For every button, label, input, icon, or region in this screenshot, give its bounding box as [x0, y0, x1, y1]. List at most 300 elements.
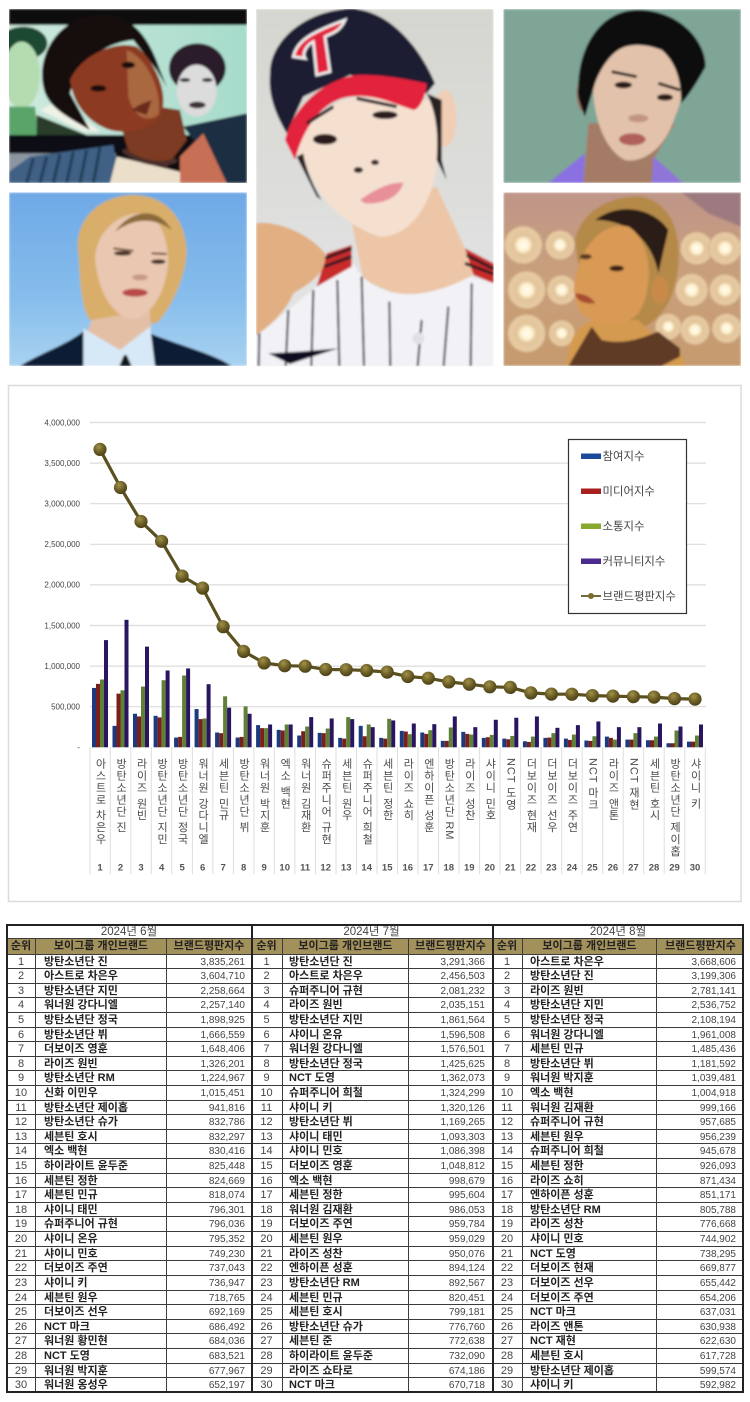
table: August 2024 ranking: 18 [501, 1204, 513, 1216]
table: July 2024 ranking: 998,679 [449, 1176, 485, 1187]
table: July 2024 ranking: 보이그룹 개인브랜드 [298, 940, 393, 952]
table: July 2024 ranking: 1,324,299 [440, 1088, 485, 1099]
table: June 2024 ranking: 방탄소년단 슈가 [44, 1116, 118, 1128]
table: June 2024 ranking: 2 [18, 970, 24, 982]
category name labels: 방탄소년단 RM [443, 758, 455, 840]
table: August 2024 ranking: 19 [501, 1218, 513, 1230]
category rank numbers: 6 [200, 862, 205, 874]
table: June 2024 ranking: 샤이니 민호 [44, 1248, 98, 1260]
table: July 2024 ranking: 15 [260, 1160, 273, 1172]
table: June 2024 ranking: 방탄소년단 정국 [44, 1014, 118, 1026]
photo: blond man in front of stage lights [503, 192, 742, 366]
table: July 2024 ranking: 세븐틴 호시 [289, 1306, 343, 1318]
table: July 2024 ranking: 18 [260, 1204, 273, 1216]
table: June 2024 ranking: 하이라이트 윤두준 [44, 1160, 128, 1172]
table: June 2024 ranking: 26 [15, 1321, 27, 1333]
table: August 2024 ranking: 1,961,008 [692, 1030, 736, 1041]
table: August 2024 ranking: NCT 도영 [530, 1248, 576, 1260]
table: July 2024 ranking: 674,186 [449, 1366, 485, 1377]
table: August 2024 ranking: 더보이즈 주연 [530, 1292, 594, 1304]
table: July 2024 ranking: 772,638 [449, 1336, 485, 1347]
table: June 2024 ranking: 방탄소년단 RM [44, 1072, 115, 1084]
table: July 2024 ranking: 1,861,564 [440, 1015, 485, 1026]
table: August 2024 ranking: 엔하이픈 성훈 [530, 1189, 594, 1201]
table: August 2024 ranking: 1,181,592 [692, 1059, 736, 1070]
table: June 2024 ranking: 슈퍼주니어 규현 [44, 1218, 118, 1230]
table: August 2024 ranking: 22 [501, 1262, 513, 1274]
table: July 2024 ranking: 세븐틴 정한 [289, 1189, 343, 1201]
table: July 2024 ranking: 1,169,265 [440, 1117, 485, 1128]
category name labels: 샤이니 민호 [484, 758, 496, 821]
table: June 2024 ranking: 818,074 [209, 1190, 245, 1201]
category name labels: 라이즈 원빈 [135, 758, 147, 821]
table: July 2024 ranking: 아스트로 차은우 [289, 970, 363, 982]
category rank numbers: 3 [138, 862, 144, 874]
table: June 2024 ranking: 30 [15, 1379, 27, 1391]
table: June 2024 ranking: 샤이니 온유 [44, 1233, 98, 1245]
table: June 2024 ranking: 3 [18, 985, 24, 997]
table: July 2024 ranking: 라이즈 성찬 [289, 1248, 343, 1260]
table: August 2024 ranking: 6 [504, 1029, 510, 1041]
table: August 2024 ranking: 워너원 박지훈 [530, 1072, 594, 1084]
table: June 2024 ranking: 21 [15, 1248, 27, 1260]
table: July 2024 ranking: NCT 도영 [289, 1072, 335, 1084]
table: June 2024 ranking: 941,816 [209, 1103, 245, 1114]
table: August 2024 ranking: 805,788 [700, 1205, 736, 1216]
category name labels: 방탄소년단 제이홉 [668, 758, 681, 857]
table: July 2024 ranking: 슈퍼주니어 규현 [289, 985, 363, 997]
category name labels: 세븐틴 민규 [217, 758, 229, 821]
table: August 2024 ranking: 630,938 [700, 1322, 736, 1333]
table: July 2024 ranking: 1 [263, 956, 270, 968]
table: July 2024 ranking: 820,451 [449, 1293, 485, 1304]
table: August 2024 ranking: 871,434 [700, 1176, 736, 1187]
table: August 2024 ranking: 655,442 [700, 1278, 736, 1289]
table: July 2024 ranking: 샤이니 온유 [289, 1029, 343, 1041]
table: June 2024 ranking: 17 [15, 1189, 27, 1201]
category name labels: 슈퍼주니어 희철 [361, 758, 373, 845]
table: June 2024 ranking: 워너원 강다니엘 [44, 999, 118, 1011]
table: June 2024 ranking: 12 [15, 1116, 27, 1128]
table: July 2024 ranking: 892,567 [449, 1278, 485, 1289]
table: July 2024 ranking: 30 [260, 1379, 273, 1391]
table: August 2024 ranking: 3,199,306 [692, 971, 736, 982]
table: June 2024 ranking: 7 [18, 1043, 24, 1055]
table: July 2024 ranking: 3,291,366 [440, 956, 485, 968]
table: June 2024 ranking: 1 [18, 956, 24, 968]
table: June 2024 ranking: 677,967 [209, 1366, 245, 1377]
photo collage and chart artwork [8, 9, 742, 902]
table: August 2024 ranking: 슈퍼주니어 규현 [530, 1116, 604, 1128]
category name labels: 세븐틴 원우 [340, 758, 352, 821]
table: July 2024 ranking: 29 [260, 1365, 273, 1377]
table: June 2024 ranking: 24 [15, 1292, 27, 1304]
table: July 2024 ranking: 670,718 [449, 1380, 485, 1391]
panel: chart frame [8, 386, 741, 902]
table: July 2024 ranking: 방탄소년단 슈가 [289, 1321, 363, 1333]
table: July 2024 ranking: 방탄소년단 정국 [289, 1058, 363, 1070]
table: July 2024 ranking: 894,124 [449, 1263, 485, 1274]
y axis labels: 2,500,000 [44, 540, 81, 549]
table: July 2024 ranking: 세븐틴 준 [289, 1335, 333, 1347]
table: July 2024 ranking: 4 [263, 999, 270, 1011]
table: August 2024 ranking: 669,877 [700, 1263, 736, 1274]
table: August 2024 ranking: 2 [504, 970, 510, 982]
table: August 2024 ranking: 851,171 [700, 1190, 736, 1201]
category rank numbers: 28 [649, 862, 659, 874]
table: June 2024 ranking: 순위 [11, 940, 31, 952]
category name labels [94, 758, 701, 857]
table: August 2024 ranking: 20 [501, 1233, 513, 1245]
August title [492, 924, 744, 939]
table: August 2024 ranking: 25 [501, 1306, 513, 1318]
table: July 2024 ranking: 17 [260, 1189, 273, 1201]
table: July 2024 ranking: 1,425,625 [440, 1059, 485, 1070]
chart legend: 브랜드평판지수 [602, 590, 676, 603]
table: June 2024 ranking: 6 [18, 1029, 24, 1041]
table: July 2024 ranking: 995,604 [449, 1190, 485, 1201]
table: July 2024 ranking: 23 [260, 1277, 273, 1289]
category rank numbers: 2 [118, 862, 123, 874]
category name labels: 세븐틴 호시 [648, 758, 660, 821]
category name labels: 라이즈 앤톤 [607, 758, 619, 821]
table: June 2024 ranking: 방탄소년단 진 [44, 956, 108, 968]
table: August 2024 ranking: 11 [501, 1102, 513, 1114]
y axis labels: 1,500,000 [44, 621, 81, 630]
table: July 2024 ranking: 9 [263, 1072, 270, 1084]
table: July 2024 ranking: 샤이니 키 [289, 1102, 333, 1114]
table: June 2024 ranking: 16 [15, 1175, 27, 1187]
category rank numbers: 10 [279, 862, 290, 874]
y axis labels: 4,000,000 [44, 418, 81, 427]
table: August 2024 ranking: 5 [504, 1014, 510, 1026]
table: July 2024 ranking: 20 [260, 1233, 273, 1245]
table: August 2024 ranking: 1,485,436 [692, 1044, 736, 1055]
table: June 2024 ranking: 세븐틴 원우 [44, 1292, 98, 1304]
table: August 2024 ranking: 엑소 백현 [530, 1087, 574, 1099]
y axis labels: 3,500,000 [44, 459, 81, 468]
table: June 2024 ranking: 세븐틴 민규 [44, 1189, 98, 1201]
category rank numbers: 9 [261, 862, 267, 874]
table: June 2024 ranking: 9 [18, 1072, 24, 1084]
table: July 2024 ranking: 엑소 백현 [289, 1175, 333, 1187]
table: June 2024 ranking: 796,301 [209, 1205, 245, 1216]
category grid lines [90, 747, 705, 874]
table: July 2024 ranking: 더보이즈 영훈 [289, 1160, 353, 1172]
y axis labels: - [77, 743, 80, 752]
table: July 2024 ranking: 방탄소년단 뷔 [289, 1116, 353, 1128]
table: August 2024 ranking: 방탄소년단 지민 [530, 999, 604, 1011]
table: August 2024 ranking [494, 926, 742, 1391]
table: July 2024 ranking: 776,760 [449, 1322, 485, 1333]
y axis labels: 500,000 [51, 702, 81, 712]
category name labels: 샤이니 키 [689, 758, 701, 810]
photo: portrait with green screen backdrop [0, 9, 247, 183]
table: June 2024 ranking: 686,492 [209, 1322, 245, 1333]
category rank numbers: 19 [464, 862, 475, 874]
chart legend: 참여지수 [602, 450, 644, 463]
table: August 2024 ranking: 23 [501, 1277, 513, 1289]
table: June 2024 ranking: 14 [15, 1145, 27, 1157]
table: August 2024 ranking: 744,902 [700, 1234, 736, 1245]
table: June 2024 ranking: 8 [18, 1058, 24, 1070]
table: July 2024 ranking: 1,362,073 [440, 1073, 485, 1084]
table: June 2024 ranking: 736,947 [209, 1278, 245, 1289]
table: July 2024 ranking: 986,053 [449, 1205, 485, 1216]
table: July 2024 ranking: 950,076 [449, 1249, 485, 1260]
table: July 2024 ranking: 2,456,503 [440, 971, 485, 982]
table: August 2024 ranking: 8 [504, 1058, 510, 1070]
table: June 2024 ranking: 1,898,925 [200, 1015, 245, 1026]
table: August 2024 ranking: 방탄소년단 진 [530, 970, 594, 982]
table: August 2024 ranking: 브랜드평판지수 [665, 940, 736, 952]
table: August 2024 ranking: 3 [504, 985, 510, 997]
table: June 2024 ranking: 방탄소년단 제이홉 [44, 1102, 128, 1114]
table: July 2024 ranking: 959,029 [449, 1234, 485, 1245]
table: July 2024 ranking: 28 [260, 1350, 273, 1362]
line series: brand reputation index [93, 443, 702, 706]
table: July 2024 ranking: 워너원 강다니엘 [289, 1043, 363, 1055]
table: August 2024 ranking: 945,678 [700, 1146, 736, 1157]
table: July 2024 ranking: 8 [263, 1058, 270, 1070]
table: July 2024 ranking: 슈퍼주니어 희철 [289, 1087, 363, 1099]
table: June 2024 ranking: 4 [18, 999, 24, 1011]
table: July 2024 ranking: 라이즈 쇼타로 [289, 1365, 353, 1377]
table: June 2024 ranking: 1,326,201 [200, 1059, 245, 1070]
table: June 2024 ranking: 652,197 [209, 1380, 245, 1391]
table: June 2024 ranking: 28 [15, 1350, 27, 1362]
category rank numbers: 24 [567, 862, 578, 874]
table: August 2024 ranking: 622,630 [700, 1336, 736, 1347]
table: July 2024 ranking: 브랜드평판지수 [415, 940, 486, 952]
table: August 2024 ranking: 라이즈 성찬 [530, 1218, 584, 1230]
table: June 2024 ranking: 신화 이민우 [44, 1087, 98, 1099]
table: June 2024 ranking: 1,666,559 [200, 1030, 245, 1041]
table: July 2024 ranking: 엔하이픈 성훈 [289, 1262, 353, 1274]
table: August 2024 ranking: 27 [501, 1335, 513, 1347]
table: June 2024 ranking: 27 [15, 1335, 27, 1347]
table: June 2024 ranking: 15 [15, 1160, 27, 1172]
table: June 2024 ranking: 더보이즈 주연 [44, 1262, 108, 1274]
table: July 2024 ranking [253, 926, 492, 1391]
category name labels: 라이즈 쇼히 [402, 758, 414, 821]
table: June 2024 ranking: 워너원 황민현 [44, 1335, 108, 1347]
table: June 2024 ranking: 19 [15, 1218, 27, 1230]
table: June 2024 ranking: 18 [15, 1204, 27, 1216]
table: August 2024 ranking: 24 [501, 1292, 513, 1304]
table: August 2024 ranking: 28 [501, 1350, 513, 1362]
table: July 2024 ranking: 799,181 [449, 1307, 485, 1318]
table: July 2024 ranking: 12 [260, 1116, 273, 1128]
table: June 2024 ranking: 워너원 박지훈 [44, 1365, 108, 1377]
category rank numbers: 13 [341, 862, 351, 874]
category name labels: NCT 도영 [504, 758, 516, 811]
category name labels: 더보이즈 선우 [545, 758, 557, 833]
table: August 2024 ranking: 라이즈 앤톤 [530, 1321, 584, 1333]
table: June 2024 ranking: 832,786 [209, 1117, 245, 1128]
table: June 2024 ranking: 796,036 [209, 1219, 245, 1230]
table: August 2024 ranking: 라이즈 쇼히 [530, 1175, 584, 1187]
category rank numbers: 8 [241, 862, 246, 874]
table: August 2024 ranking: 7 [504, 1043, 510, 1055]
table: July 2024 ranking: 11 [261, 1102, 272, 1114]
chart: brand reputation combo chart [44, 418, 706, 874]
table: July 2024 ranking: 16 [260, 1175, 273, 1187]
category rank numbers: 5 [179, 862, 185, 874]
category rank numbers: 7 [220, 862, 226, 874]
table: August 2024 ranking: 슈퍼주니어 희철 [530, 1145, 604, 1157]
table: June 2024 ranking: 737,043 [209, 1263, 245, 1274]
table: June 2024 ranking: 라이즈 원빈 [44, 1058, 98, 1070]
category name labels: 엑소 백현 [279, 758, 291, 810]
category rank numbers: 27 [628, 862, 639, 874]
table: June 2024 ranking: 684,036 [209, 1336, 245, 1347]
table: August 2024 ranking: 1,039,481 [692, 1073, 736, 1084]
table: June 2024 ranking [8, 926, 251, 1391]
table: August 2024 ranking: 4 [504, 999, 510, 1011]
table: August 2024 ranking: 14 [501, 1145, 513, 1157]
y axis labels: 3,000,000 [44, 500, 81, 508]
table: July 2024 ranking: 21 [260, 1248, 273, 1260]
table: June 2024 ranking: 10 [15, 1087, 27, 1099]
table: August 2024 ranking: 3,668,606 [692, 956, 736, 968]
August title: 2024년 8월 [590, 926, 646, 938]
table: August 2024 ranking: 방탄소년단 제이홉 [530, 1365, 614, 1377]
table: June 2024 ranking: 824,669 [209, 1176, 245, 1187]
table: June 2024 ranking: 1,648,406 [200, 1044, 245, 1055]
table: July 2024 ranking: 6 [263, 1029, 270, 1041]
table: July 2024 ranking: 샤이니 민호 [289, 1145, 343, 1157]
table: June 2024 ranking: 692,169 [209, 1307, 245, 1318]
category rank numbers: 18 [444, 862, 454, 874]
y axis labels: 2,000,000 [44, 581, 81, 590]
table: August 2024 ranking: 738,295 [700, 1249, 736, 1260]
table: August 2024 ranking: 라이즈 원빈 [530, 985, 584, 997]
June title [7, 924, 251, 939]
table: June 2024 ranking: 더보이즈 선우 [44, 1306, 108, 1318]
table: June 2024 ranking: 보이그룹 개인브랜드 [54, 940, 148, 952]
category name labels: 방탄소년단 뷔 [238, 758, 250, 833]
chart legend [568, 440, 686, 614]
category name labels: 방탄소년단 지민 [156, 758, 168, 845]
table: August 2024 ranking: 13 [501, 1131, 513, 1143]
table: June 2024 ranking: 2,258,664 [200, 986, 245, 997]
table: August 2024 ranking: 세븐틴 원우 [530, 1131, 584, 1143]
table: June 2024 ranking: 3,835,261 [200, 956, 245, 968]
table: August 2024 ranking: 999,166 [700, 1103, 736, 1114]
photo: man with black hair on teal backdrop [503, 9, 741, 183]
table: June 2024 ranking: 22 [15, 1262, 27, 1274]
table: August 2024 ranking: 776,668 [700, 1219, 736, 1230]
photo: man in red and navy baseball cap and striped jersey [256, 9, 494, 366]
table: August 2024 ranking: 16 [501, 1175, 513, 1187]
category name labels: 아스트로 차은우 [94, 758, 106, 845]
table: August 2024 ranking: 워너원 김재환 [530, 1102, 594, 1114]
category name labels: 방탄소년단 진 [114, 758, 127, 833]
table: June 2024 ranking: 샤이니 태민 [44, 1204, 98, 1216]
table: August 2024 ranking: 순위 [497, 940, 517, 952]
table: August 2024 ranking: 샤이니 민호 [530, 1233, 584, 1245]
table: June 2024 ranking: 749,230 [209, 1249, 245, 1260]
table: July 2024 ranking: 순위 [256, 940, 277, 952]
category rank numbers: 22 [526, 862, 536, 874]
table: June 2024 ranking: 3,604,710 [200, 971, 245, 982]
table: August 2024 ranking: 21 [501, 1248, 513, 1260]
table: August 2024 ranking: 654,206 [700, 1293, 736, 1304]
category name labels: 세븐틴 정한 [381, 758, 393, 821]
category name labels: NCT 마크 [586, 758, 598, 811]
category name labels: 라이즈 성찬 [463, 758, 475, 821]
table: August 2024 ranking: 599,574 [700, 1366, 736, 1377]
chart legend: 커뮤니티지수 [602, 555, 665, 568]
table: August 2024 ranking: 29 [501, 1365, 513, 1377]
table: August 2024 ranking: 세븐틴 호시 [530, 1350, 584, 1362]
table: August 2024 ranking: 아스트로 차은우 [530, 956, 604, 968]
table: August 2024 ranking: 637,031 [700, 1307, 736, 1318]
table: August 2024 ranking: 더보이즈 현재 [530, 1262, 594, 1274]
table: June 2024 ranking: 29 [15, 1365, 27, 1377]
table: June 2024 ranking: 832,297 [209, 1132, 245, 1143]
table: August 2024 ranking: 592,982 [700, 1380, 736, 1391]
table: July 2024 ranking: 25 [260, 1306, 273, 1318]
y axis labels: 1,000,000 [44, 662, 81, 671]
table: August 2024 ranking: 방탄소년단 정국 [530, 1014, 604, 1026]
table: June 2024 ranking: 더보이즈 영훈 [44, 1043, 108, 1055]
table: July 2024 ranking: 라이즈 원빈 [289, 999, 343, 1011]
table: August 2024 ranking: 12 [501, 1116, 513, 1128]
table: June 2024 ranking: 세븐틴 호시 [44, 1131, 98, 1143]
table: August 2024 ranking: 보이그룹 개인브랜드 [542, 940, 637, 952]
table: June 2024 ranking: 워너원 옹성우 [44, 1379, 108, 1391]
category name labels: 방탄소년단 정국 [176, 758, 188, 845]
category name labels: 더보이즈 현재 [525, 758, 537, 833]
table: August 2024 ranking: 17 [501, 1189, 513, 1201]
table: July 2024 ranking: 워너원 김재환 [289, 1204, 353, 1216]
table: July 2024 ranking: 세븐틴 원우 [289, 1233, 343, 1245]
table: July 2024 ranking: 1,576,501 [440, 1044, 485, 1055]
table: June 2024 ranking: 11 [15, 1102, 27, 1114]
table: July 2024 ranking: 24 [260, 1292, 273, 1304]
table: August 2024 ranking: 세븐틴 민규 [530, 1043, 584, 1055]
table: June 2024 ranking: 1,015,451 [200, 1088, 245, 1099]
table: August 2024 ranking: 2,108,194 [692, 1015, 736, 1026]
table: June 2024 ranking: NCT 도영 [44, 1350, 90, 1362]
table: July 2024 ranking: 3 [263, 985, 270, 997]
y axis labels [44, 418, 81, 752]
category name labels: 슈퍼주니어 규현 [320, 758, 332, 845]
table: August 2024 ranking: 15 [501, 1160, 513, 1172]
table: June 2024 ranking: 2,257,140 [200, 1000, 245, 1011]
table: July 2024 ranking: 732,090 [449, 1351, 485, 1362]
category name labels: NCT 재현 [627, 758, 639, 811]
table: June 2024 ranking: 718,765 [209, 1293, 245, 1304]
table: July 2024 ranking: 2,081,232 [440, 986, 485, 997]
table: June 2024 ranking: 엑소 백현 [44, 1145, 88, 1157]
table: August 2024 ranking: 세븐틴 정한 [530, 1160, 584, 1172]
category rank numbers: 1 [97, 862, 103, 874]
table: August 2024 ranking: 방탄소년단 뷔 [530, 1058, 594, 1070]
table: July 2024 ranking: 7 [263, 1043, 270, 1055]
table: June 2024 ranking: 5 [18, 1014, 24, 1026]
table: July 2024 ranking: 22 [260, 1262, 273, 1274]
table: August 2024 ranking: 워너원 강다니엘 [530, 1029, 604, 1041]
table: July 2024 ranking: 14 [260, 1145, 273, 1157]
table: July 2024 ranking: 더보이즈 주연 [289, 1218, 353, 1230]
July title: 2024년 7월 [343, 926, 400, 938]
category rank numbers: 11 [300, 862, 311, 874]
category name labels: 워너원 박지훈 [258, 758, 270, 833]
table: June 2024 ranking: 683,521 [209, 1351, 245, 1362]
